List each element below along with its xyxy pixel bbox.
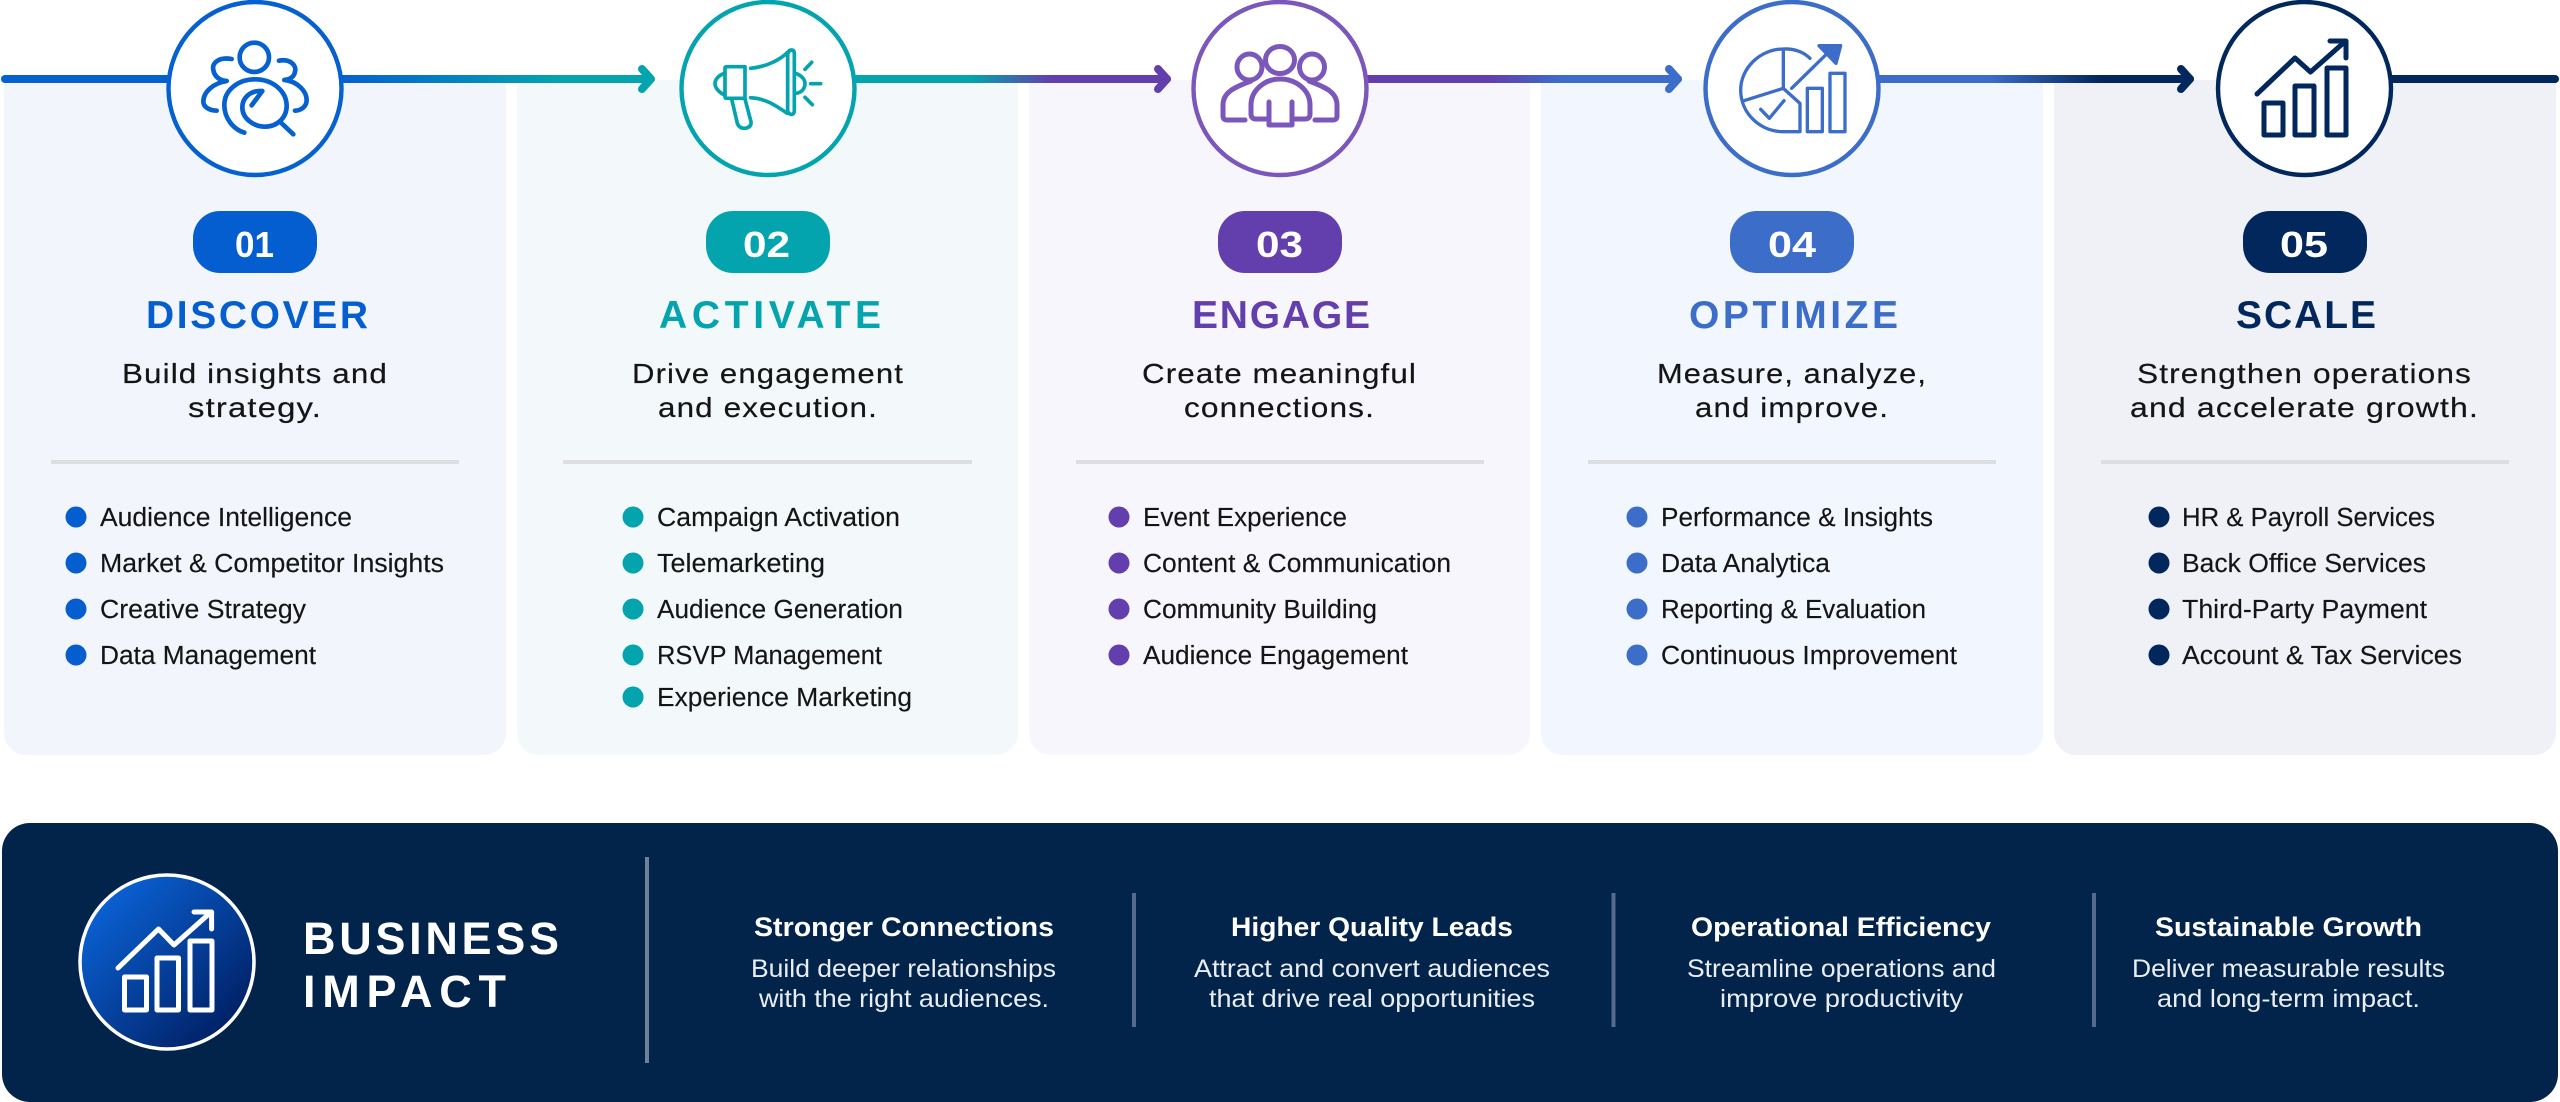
arrow: discover to activate [330, 69, 651, 89]
description: optimize [1657, 358, 1927, 423]
panel: optimize [1541, 80, 2043, 755]
number badge 02 [706, 211, 830, 273]
icon circle: optimize analytics [1706, 2, 1878, 175]
description: activate: Drive engagement [632, 358, 904, 389]
arrow: activate to engage [845, 69, 1167, 89]
arrow: engage to optimize [1355, 69, 1678, 89]
description: discover: Build insights and [122, 358, 388, 389]
description: activate: and execution. [658, 392, 878, 423]
list: discover services: Market & Competitor Insights [100, 550, 444, 578]
arrow: end segment [2380, 75, 2555, 83]
panel: scale [2054, 80, 2556, 755]
panel: engage [1029, 80, 1530, 755]
arrow: optimize to scale [1870, 69, 2190, 89]
impact: stronger connections: Stronger Connections [754, 912, 1054, 942]
panel: activate [517, 80, 1018, 755]
description: engage: Create meaningful [1142, 358, 1417, 389]
impact: higher quality leads: Attract and convert audiences [1194, 955, 1550, 983]
icon circle: activate megaphone [682, 2, 854, 175]
number badge 03 [1218, 211, 1342, 273]
list: engage services: Event Experience [1143, 504, 1347, 532]
list: scale services: Account & Tax Services [2182, 642, 2462, 670]
heading: business impact: BUSINESS [303, 913, 559, 964]
list: engage services [1108, 504, 1451, 670]
number badge 01: 01 [235, 224, 274, 265]
list: discover services [66, 504, 444, 670]
description: scale [2130, 358, 2479, 423]
panel: discover [4, 80, 506, 755]
heading: business impact [303, 913, 559, 1017]
impact: higher quality leads: that drive real opportunities [1209, 985, 1535, 1013]
icon circle: scale growth chart [2218, 2, 2391, 175]
impact: operational efficiency: Streamline operations and [1687, 955, 1996, 983]
number badge 04: 04 [1768, 224, 1816, 265]
arrow: start segment [5, 75, 180, 83]
list: scale services: Back Office Services [2182, 550, 2426, 578]
icon circle: engage people [1194, 2, 1366, 175]
list: engage services: Community Building [1143, 596, 1377, 624]
list: discover services: Data Management [100, 642, 316, 670]
impact: operational efficiency: improve productivity [1720, 985, 1964, 1013]
description: scale: Strengthen operations [2137, 358, 2472, 389]
list: optimize services: Performance & Insights [1661, 504, 1933, 532]
impact: operational efficiency [1687, 912, 1996, 1013]
heading: optimize: OPTIMIZE [1689, 294, 1898, 337]
list: activate services: RSVP Management [657, 642, 882, 670]
impact: higher quality leads [1194, 912, 1550, 1013]
impact: sustainable growth: Sustainable Growth [2155, 912, 2422, 942]
description: engage: connections. [1184, 392, 1375, 423]
impact: operational efficiency: Operational Efficiency [1691, 912, 1991, 942]
number badge 03: 03 [1256, 224, 1303, 265]
heading: scale: SCALE [2236, 294, 2376, 337]
heading: business impact: IMPACT [303, 966, 506, 1017]
number badge 01 [193, 211, 317, 273]
list: activate services: Audience Generation [657, 596, 903, 624]
number badge 04 [1730, 211, 1854, 273]
list: activate services: Experience Marketing [657, 684, 912, 712]
list: optimize services: Data Analytica [1661, 550, 1831, 578]
list: discover services: Audience Intelligence [100, 504, 352, 532]
impact: stronger connections [751, 912, 1056, 1013]
impact: sustainable growth: and long-term impact. [2157, 985, 2420, 1013]
list: scale services: Third-Party Payment [2182, 596, 2427, 624]
description: optimize: Measure, analyze, [1657, 358, 1927, 389]
number badge 05: 05 [2280, 224, 2328, 265]
description: optimize: and improve. [1695, 392, 1889, 423]
panel: business impact [2, 823, 2558, 1102]
list: engage services: Audience Engagement [1143, 642, 1408, 670]
description: discover: strategy. [188, 392, 322, 423]
heading: activate: ACTIVATE [659, 294, 881, 337]
list: activate services: Telemarketing [657, 550, 825, 578]
list: engage services: Content & Communication [1143, 550, 1451, 578]
number badge 05 [2243, 211, 2367, 273]
impact: sustainable growth [2132, 912, 2445, 1013]
icon circle: discover audience search [168, 2, 342, 175]
list: activate services: Campaign Activation [657, 504, 900, 532]
description: engage [1142, 358, 1417, 423]
list: discover services: Creative Strategy [100, 596, 306, 624]
impact: stronger connections: with the right audiences. [758, 985, 1049, 1013]
icon: business impact growth chart [80, 875, 254, 1049]
list: optimize services [1626, 504, 1957, 670]
impact: sustainable growth: Deliver measurable results [2132, 955, 2445, 983]
heading: engage: ENGAGE [1192, 294, 1370, 337]
description: activate [632, 358, 904, 423]
impact: stronger connections: Build deeper relationships [751, 955, 1056, 983]
heading: discover: DISCOVER [146, 294, 368, 337]
list: scale services [2148, 504, 2462, 670]
list: activate services [622, 504, 912, 712]
list: optimize services: Reporting & Evaluation [1661, 596, 1926, 624]
list: optimize services: Continuous Improvement [1661, 642, 1957, 670]
impact: higher quality leads: Higher Quality Leads [1231, 912, 1513, 942]
list: scale services: HR & Payroll Services [2182, 504, 2435, 532]
description: discover [122, 358, 388, 423]
number badge 02: 02 [743, 224, 790, 265]
description: scale: and accelerate growth. [2130, 392, 2479, 423]
